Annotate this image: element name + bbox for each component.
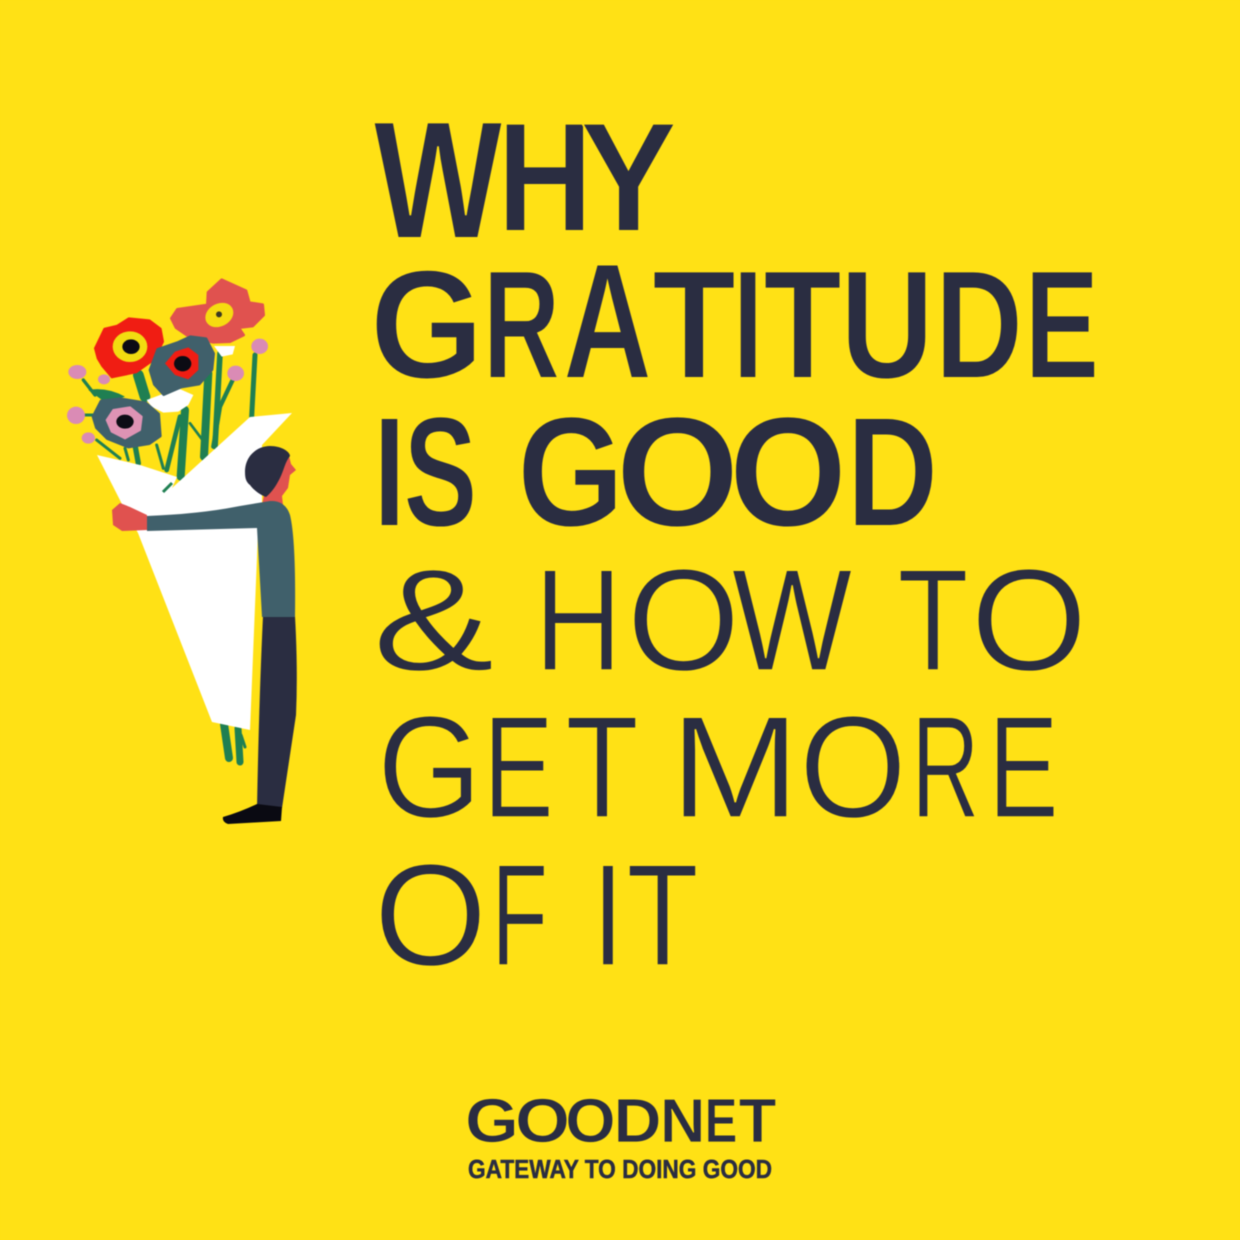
neck and face [262, 450, 296, 505]
logo wordmark: T [739, 1087, 776, 1156]
logo wordmark: E [705, 1087, 737, 1156]
heading line: GRATITUDE: I [733, 238, 764, 411]
subheading line: GET MORE: M [670, 686, 800, 848]
subheading line: GET MORE: E [483, 686, 554, 848]
heading line: IS GOOD: O [616, 385, 740, 560]
heading line: IS GOOD: I [373, 385, 406, 560]
subheading line: GET MORE: O [799, 686, 907, 848]
hair [245, 446, 290, 497]
white paper wrapping [97, 413, 292, 730]
subheading line: GET MORE: G [377, 686, 482, 848]
subheading line: OF IT: F [491, 834, 548, 996]
red flower [95, 319, 163, 377]
heading line: GRATITUDE: E [1024, 238, 1099, 411]
subheading line: OF IT: T [627, 834, 698, 996]
teal flower with pink centre [93, 399, 160, 447]
torso and arm [147, 501, 295, 617]
stem ends below wrapping [224, 724, 245, 762]
logo tagline: GATEWAY TO DOING GOOD [468, 1154, 772, 1184]
logo wordmark: G [465, 1087, 519, 1156]
teal flower with red centre [150, 337, 214, 395]
subheading line: GET MORE: E [988, 686, 1058, 848]
logo wordmark: N [660, 1087, 705, 1156]
heading line: IS GOOD: S [404, 385, 477, 560]
subheading line: GET MORE: T [566, 686, 636, 848]
hand [112, 503, 147, 531]
leg [257, 616, 297, 808]
logo [465, 1087, 776, 1184]
stems [83, 353, 255, 477]
shoe [223, 804, 282, 824]
logo wordmark: O [515, 1087, 570, 1156]
heading line: IS GOOD: O [729, 385, 847, 560]
stem sliver on paper [163, 483, 172, 492]
small pink buds [67, 339, 268, 444]
heading line: WHY: W [374, 86, 503, 274]
heading line: GRATITUDE: T [652, 238, 736, 411]
logo wordmark: O [565, 1087, 616, 1156]
small white flower [214, 346, 235, 357]
leaf [88, 389, 125, 403]
subheading line: OF IT: O [374, 834, 487, 996]
coral flower [171, 280, 264, 342]
heading line: WHY: Y [580, 91, 677, 265]
title [370, 86, 1099, 996]
subheading line: & HOW TO: O [627, 539, 740, 701]
heading line: GRATITUDE: D [935, 238, 1023, 411]
heading line: GRATITUDE: A [563, 229, 652, 413]
subheading line: GET MORE: R [911, 686, 980, 848]
subheading line: & HOW TO: O [971, 539, 1087, 701]
heading line: GRATITUDE: T [763, 238, 842, 411]
heading line: GRATITUDE: U [840, 238, 934, 411]
logo wordmark: D [614, 1087, 662, 1156]
illustration: person hugging a bouquet [67, 280, 297, 824]
subheading line: & HOW TO: H [534, 539, 622, 701]
heading line: GRATITUDE: R [483, 238, 560, 411]
subheading line: & HOW TO: & [372, 539, 495, 701]
subheading line: & HOW TO: W [732, 539, 852, 701]
subheading line: OF IT: I [592, 834, 624, 996]
heading line: IS GOOD: D [846, 385, 938, 560]
heading line: IS GOOD: G [517, 385, 624, 560]
white flower [147, 388, 193, 413]
heading line: WHY: H [497, 91, 593, 265]
bouquet stems and flowers [67, 280, 268, 477]
heading line: GRATITUDE: G [370, 238, 484, 411]
subheading line: & HOW TO: T [898, 539, 968, 701]
